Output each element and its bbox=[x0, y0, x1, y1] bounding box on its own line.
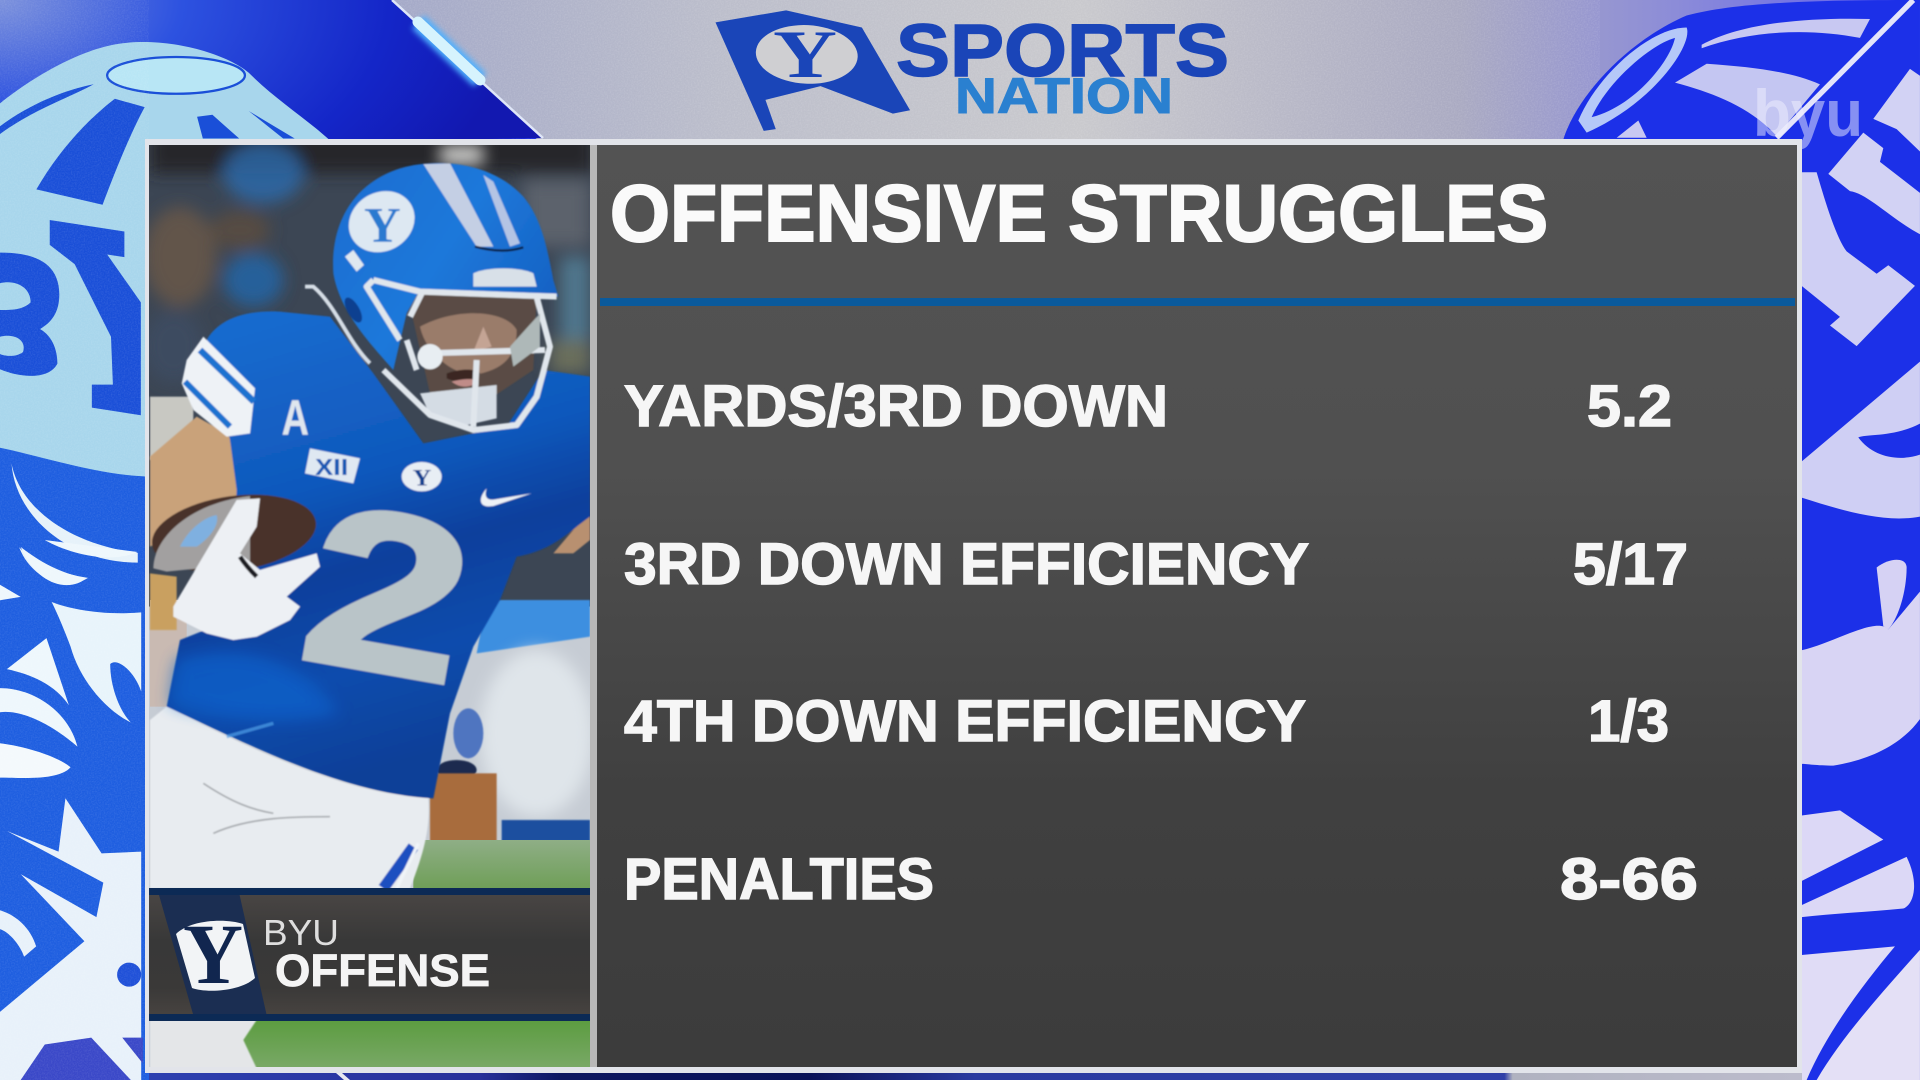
helmet bbox=[333, 163, 558, 370]
arm bbox=[150, 417, 238, 547]
jersey bbox=[167, 311, 590, 798]
logo: BYU Sports Nation bbox=[715, 9, 1229, 131]
stat row: penalties bbox=[624, 847, 1698, 912]
stat row: fourth down efficiency: 4TH DOWN EFFICIENCY bbox=[624, 689, 1306, 754]
player bbox=[147, 163, 590, 1068]
jersey number 2: 2 bbox=[287, 456, 488, 733]
icon: pennant flag bbox=[715, 10, 910, 131]
background: right blue artwork bbox=[1563, 0, 1920, 1080]
stat row: fourth down efficiency: 1/3 bbox=[1588, 689, 1669, 754]
swoosh bbox=[481, 488, 532, 506]
watermark: byu: byu bbox=[1753, 76, 1863, 150]
caption: BYU: BYU bbox=[263, 912, 339, 953]
icon: BYU Y logo: Y bbox=[183, 906, 243, 1002]
diagonal navy band bbox=[157, 888, 268, 1021]
title rule bbox=[600, 298, 1795, 306]
caption: OFFENSE: OFFENSE bbox=[275, 945, 490, 996]
stat row: yards per third down bbox=[624, 374, 1672, 439]
stat row: penalties: PENALTIES bbox=[624, 847, 934, 912]
face bbox=[412, 293, 537, 397]
diagonal line with glowing tube bbox=[392, 0, 543, 138]
conference patch bbox=[305, 448, 360, 483]
stat row: yards per third down: 5.2 bbox=[1587, 374, 1672, 439]
chest logo bbox=[402, 462, 442, 491]
right arm bbox=[553, 510, 590, 553]
player: Y bbox=[364, 197, 401, 253]
background: left blue artwork bbox=[0, 0, 543, 1080]
stat row: third down efficiency: 3RD DOWN EFFICIENCY bbox=[624, 532, 1309, 597]
panel: player photo bbox=[140, 130, 600, 1080]
photo backdrop bbox=[140, 130, 600, 1080]
pants bbox=[150, 707, 429, 888]
wordmark: NATION: NATION bbox=[955, 68, 1173, 124]
stat row: third down efficiency bbox=[624, 532, 1688, 597]
stat row: fourth down efficiency bbox=[624, 689, 1669, 754]
chest logo: Y bbox=[413, 465, 431, 491]
flag Y letter: Y bbox=[773, 16, 837, 92]
panel: player caption bar bbox=[149, 888, 590, 1021]
divider between photo and stats bbox=[590, 145, 597, 1067]
facemask bbox=[367, 280, 557, 430]
conference patch: XII bbox=[315, 454, 348, 480]
panel frame bbox=[145, 139, 1802, 1073]
wordmark: SPORTS: SPORTS bbox=[896, 9, 1229, 92]
glove bbox=[173, 498, 320, 640]
background: silver top band bbox=[392, 0, 1920, 145]
title: OFFENSIVE STRUGGLES bbox=[610, 169, 1548, 259]
stat row: penalties: 8-66 bbox=[1560, 847, 1698, 912]
football bbox=[151, 494, 318, 572]
bottom strip under the panel bbox=[149, 1073, 1802, 1080]
panel: stats bbox=[597, 145, 1797, 1067]
stat row: third down efficiency: 5/17 bbox=[1573, 532, 1688, 597]
stat row: yards per third down: YARDS/3RD DOWN bbox=[624, 374, 1168, 439]
sleeve bbox=[182, 337, 255, 437]
background: grain texture bbox=[392, 0, 1600, 140]
sleeve A patch: A bbox=[282, 390, 309, 446]
